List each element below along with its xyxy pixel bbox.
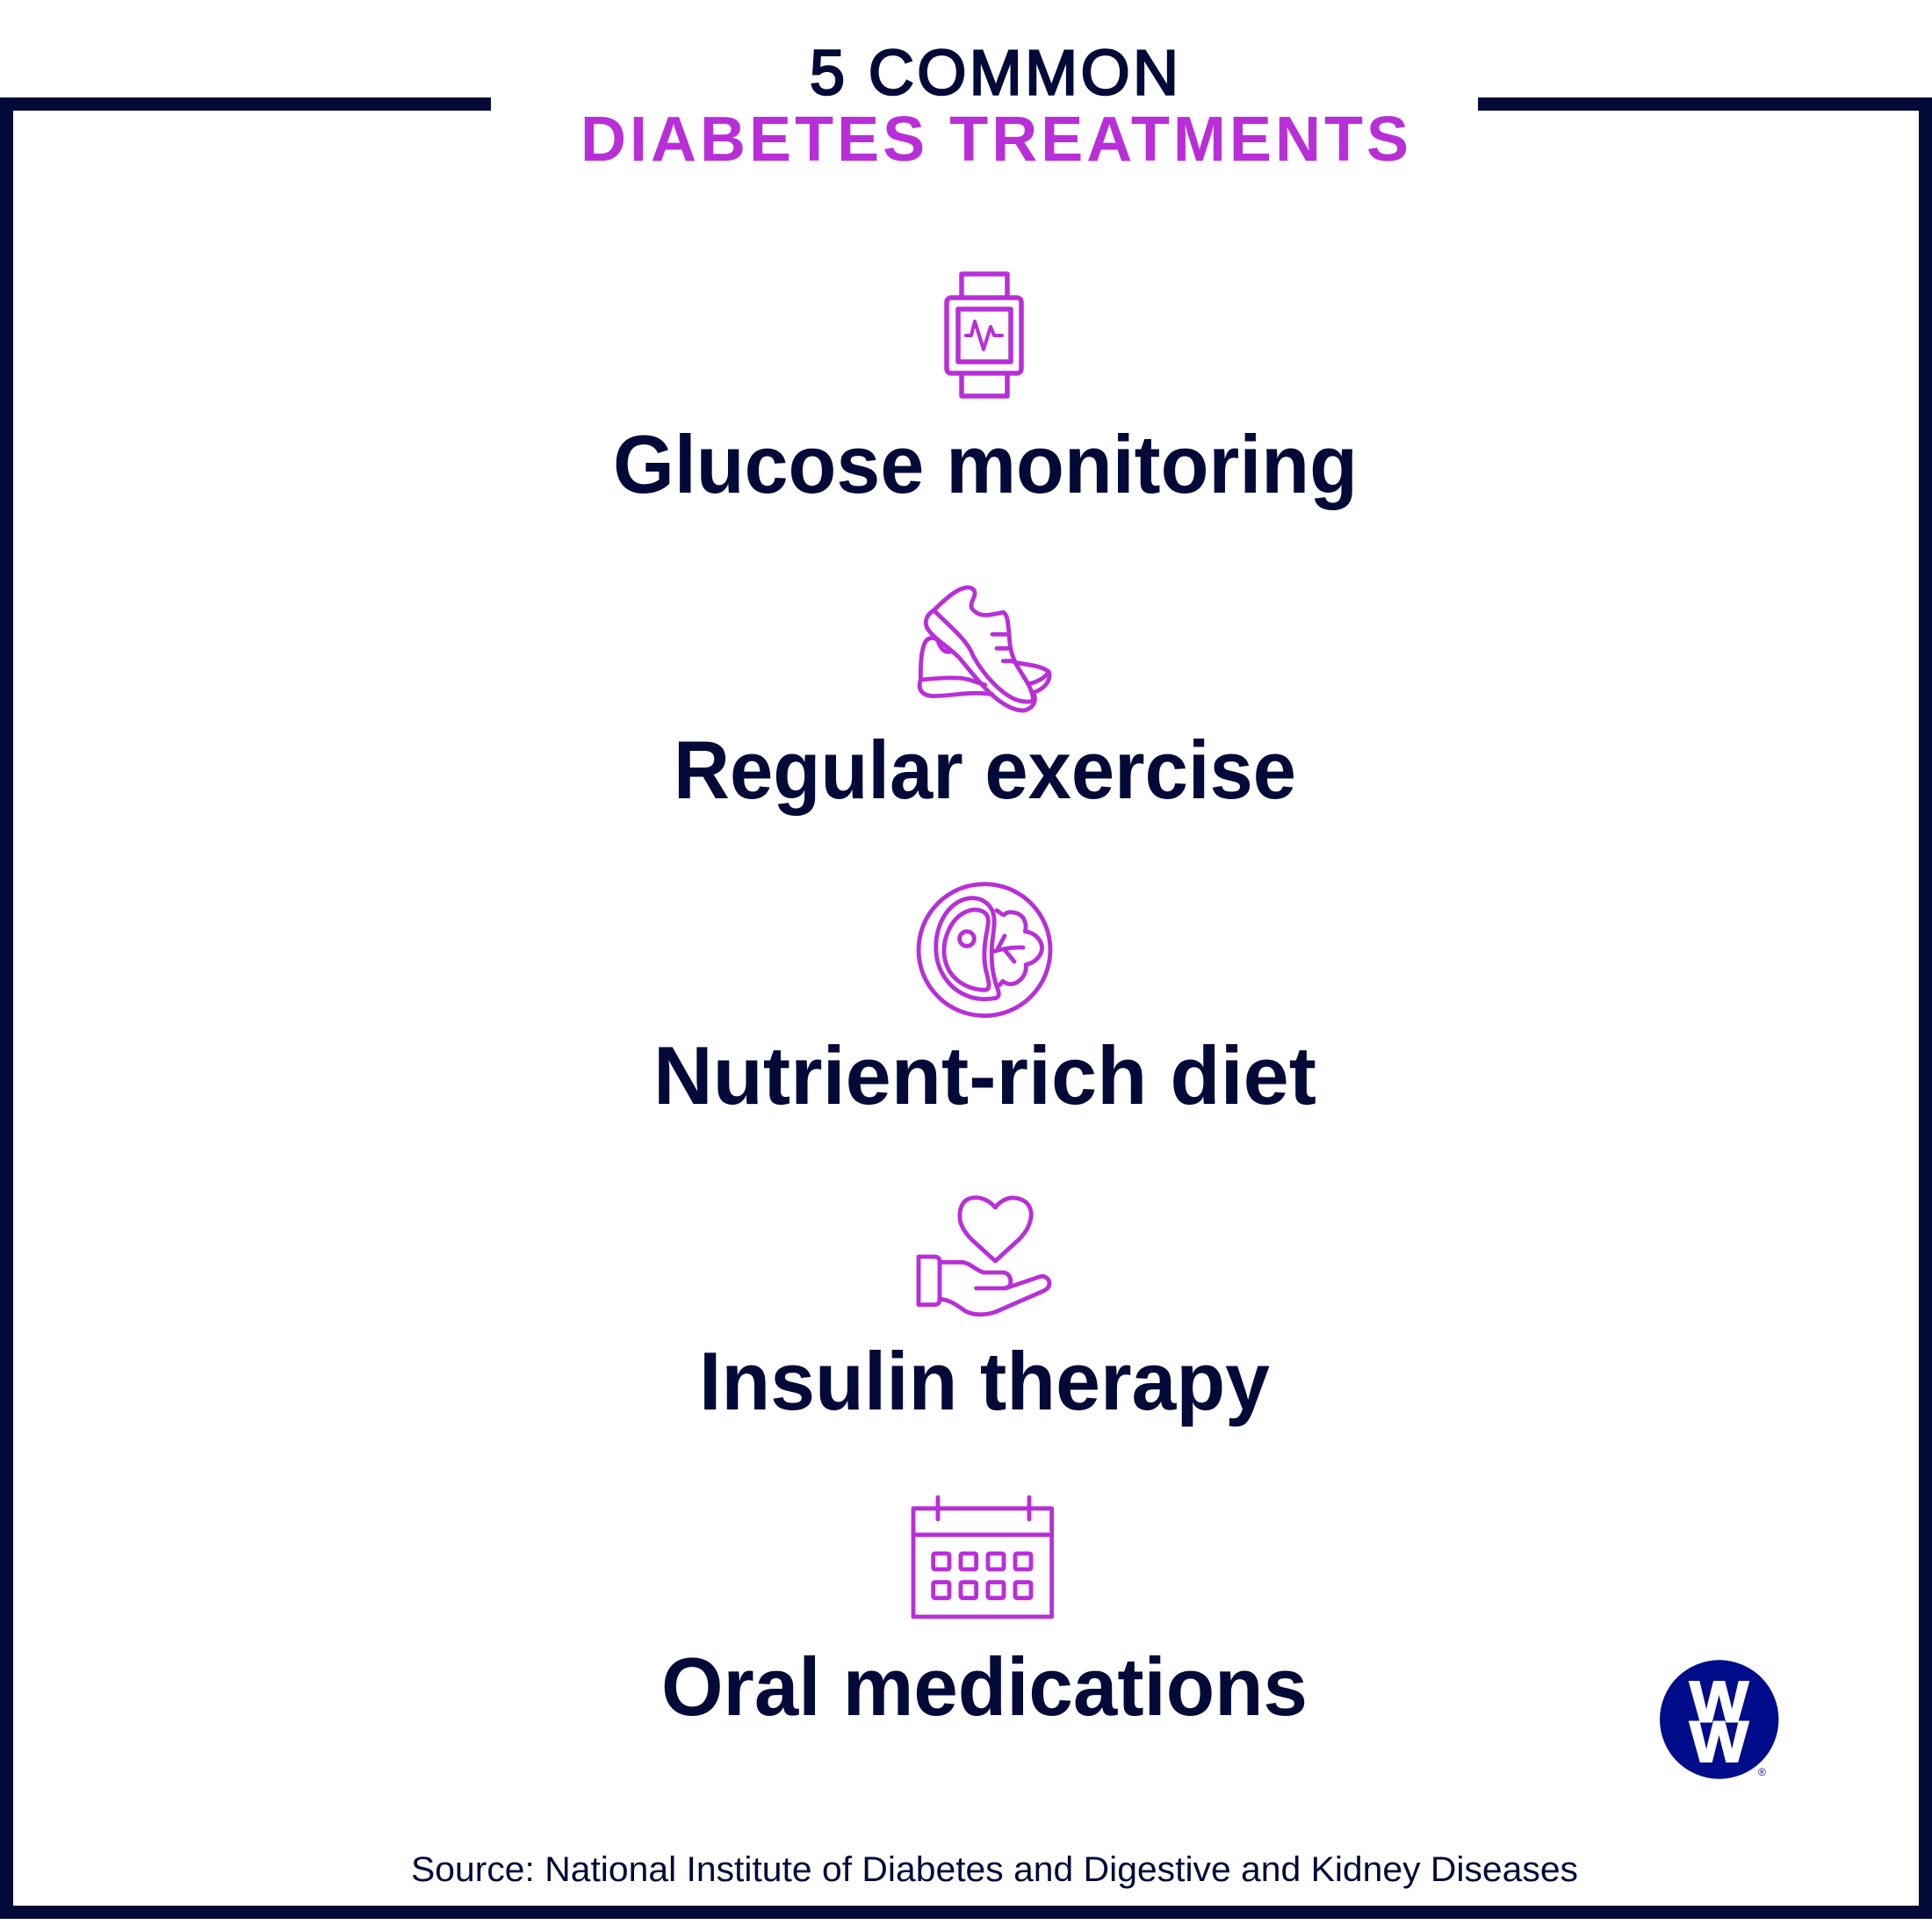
icon: plate with steak and greens (919, 884, 1050, 1016)
icon: smartwatch (947, 274, 1021, 396)
title (580, 39, 1409, 175)
icon: hand holding heart (919, 1198, 1049, 1315)
logo: WW: W (1690, 1669, 1749, 1734)
logo: WW (1660, 1660, 1778, 1779)
heading: oral medications: Oral medications (661, 1640, 1308, 1733)
source note: Source: National Institute of Diabetes and Digestive and Kidney Diseases (411, 1850, 1578, 1889)
icon: running shoes (919, 588, 1049, 710)
logo: WW: ® (1758, 1766, 1766, 1778)
heading: regular exercise: Regular exercise (674, 724, 1296, 816)
title line 2: DIABETES TREATMENTS (580, 105, 1409, 175)
logo: WW: W (1690, 1709, 1749, 1774)
heading: nutrient-rich diet: Nutrient-rich diet (653, 1029, 1316, 1121)
heading: insulin therapy: Insulin therapy (699, 1335, 1270, 1427)
heading: glucose monitoring: Glucose monitoring (613, 418, 1358, 510)
title line 1: 5 COMMON (810, 39, 1179, 109)
icon: calendar (913, 1497, 1052, 1617)
